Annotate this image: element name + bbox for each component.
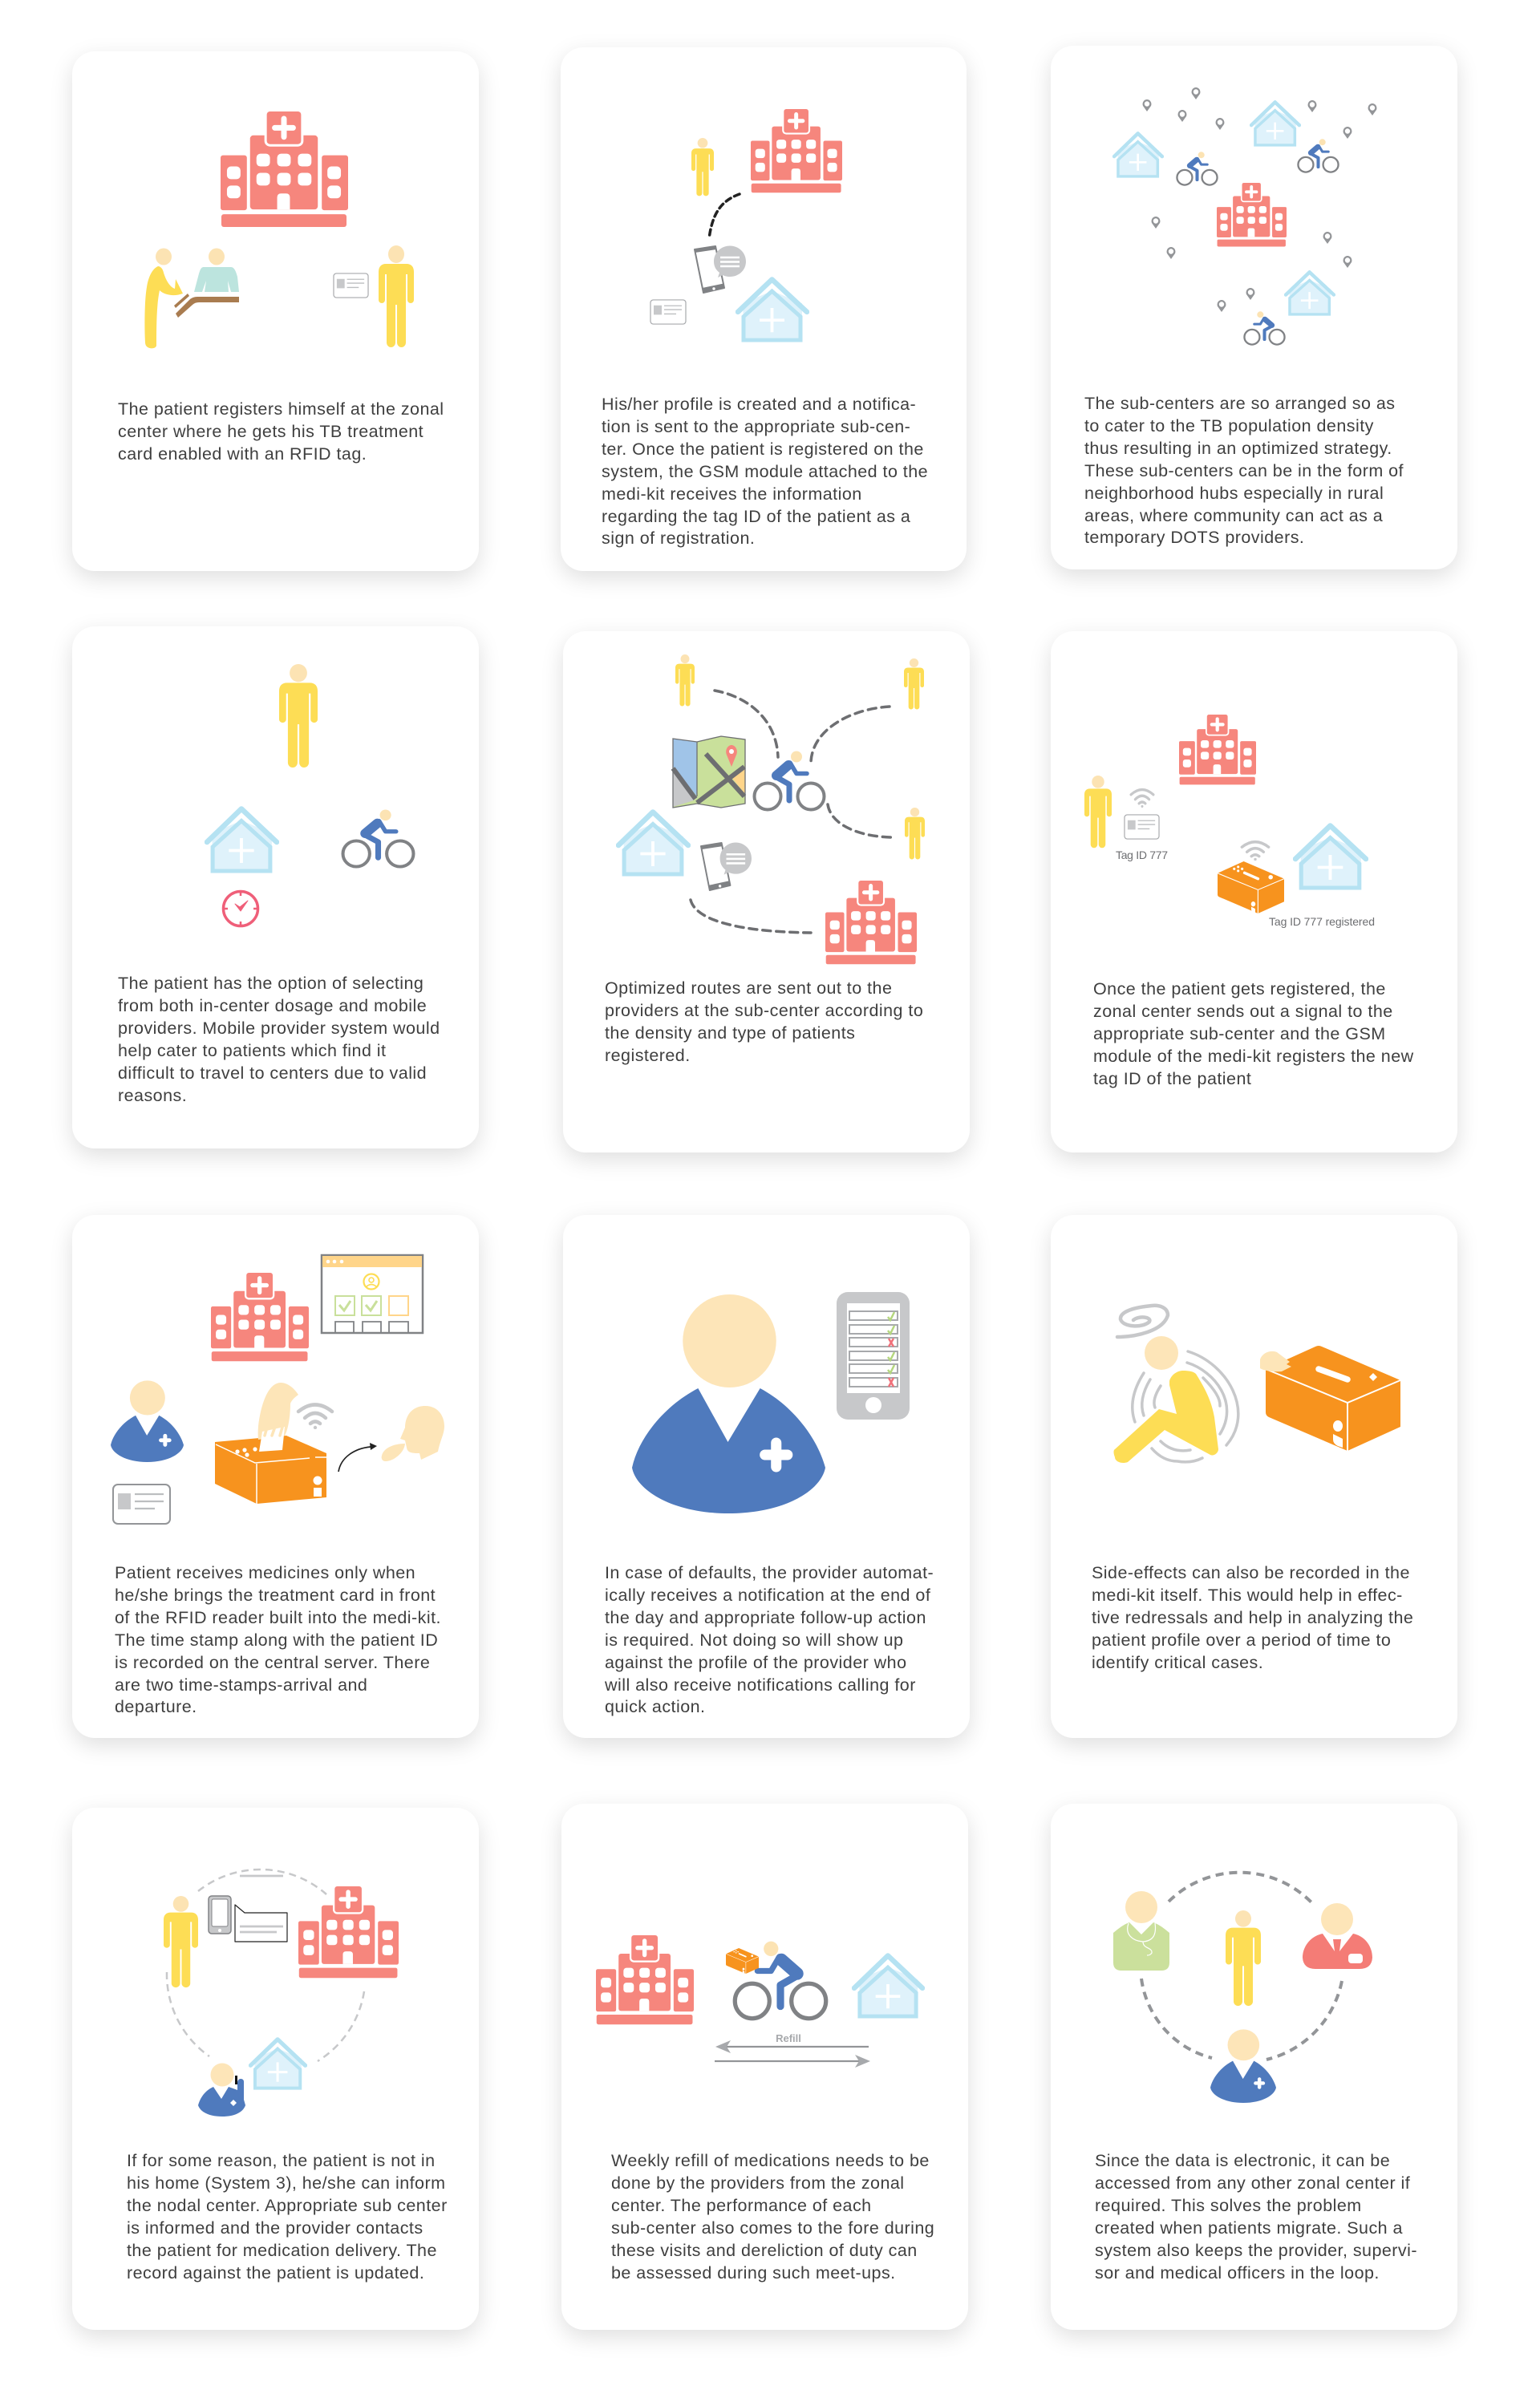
icon: provider: [111, 1380, 184, 1462]
icon: medi-kit: [1266, 1346, 1400, 1451]
text: step description: [605, 978, 923, 1065]
text: step description: [1095, 2151, 1417, 2283]
text: step description: to cater to the TB population density: [1084, 416, 1374, 435]
icon: patient: [279, 664, 318, 768]
panel: default notifications: [563, 1215, 970, 1738]
panel: zonal center registration: [72, 51, 479, 571]
icon: treatment card: [334, 273, 368, 298]
text: step description: [1092, 1563, 1413, 1672]
illustration: RFID reader on medi-kit: [111, 1254, 444, 1525]
text: step description: tion is sent to the appropriate sub-cen-: [602, 417, 910, 436]
text: step description: identify critical cases.: [1092, 1653, 1263, 1672]
icon: provider: [632, 1294, 825, 1513]
text: step description: from both in-center dosage and mobile: [118, 996, 427, 1015]
text: step description: of the RFID reader built into the medi-kit.: [115, 1608, 441, 1627]
icon: shaking lines: [1133, 1351, 1238, 1462]
illustration: patient calls nodal center: [164, 1869, 399, 2117]
icon: patient taking medicine: [382, 1406, 444, 1461]
text: step description: reasons.: [118, 1086, 187, 1105]
text: step description: His/her profile is created and a notifica-: [602, 395, 916, 414]
icon: message bubble: [235, 1876, 287, 1942]
text: step description: zonal center sends out a signal to the: [1093, 1002, 1393, 1021]
panel: tag registration: [1051, 631, 1457, 1152]
arrows: dashed routes: [691, 691, 894, 933]
icon: patient: [164, 1896, 198, 1987]
text: step description: help cater to patients which find it: [118, 1041, 386, 1060]
text: step description: [611, 2151, 934, 2283]
icon: sick patient: [1113, 1336, 1218, 1463]
icon: patient: [1226, 1910, 1261, 2006]
text: step description: tive redressals and help in analyzing the: [1092, 1608, 1413, 1627]
text: step description: providers. Mobile provider system would: [118, 1019, 440, 1038]
text: step description: thus resulting in an optimized strategy.: [1084, 439, 1392, 458]
icon: medi-kit: [1218, 861, 1284, 913]
panel: dosage options: [72, 626, 479, 1148]
text: step description: If for some reason, the patient is not in: [127, 2151, 436, 2170]
text: step description: providers at the sub-center according to: [605, 1001, 923, 1020]
icon: mobile provider: [343, 809, 413, 867]
panel: data accessible anywhere: [1051, 1804, 1457, 2330]
illustration: notification to sub-center: [650, 109, 842, 342]
icon: hospital: [211, 1271, 309, 1361]
illustration: provider and checklist: [632, 1292, 910, 1513]
text: step description: [605, 1563, 934, 1716]
text: step description: he/she brings the treatment card in front: [115, 1586, 436, 1605]
text: step description: [115, 1563, 441, 1716]
icon: patient: [1084, 776, 1112, 848]
arrows: dashed loop: [1141, 1873, 1342, 2060]
icons: sub-center houses: [1114, 102, 1334, 315]
icon: treatment card: [113, 1485, 170, 1524]
text: step description: center. The performance of each: [611, 2196, 872, 2215]
illustration: network around patient: [1113, 1870, 1372, 2103]
text: step description: Patient receives medicines only when: [115, 1563, 415, 1582]
text: step description: The time stamp along with the patient ID: [115, 1630, 438, 1650]
text: step description: [127, 2151, 448, 2283]
icon: provider: [1210, 2029, 1276, 2103]
text: step description: Since the data is electronic, it can be: [1095, 2151, 1390, 2170]
text: step description: sign of registration.: [602, 529, 755, 548]
icon: hospital: [751, 107, 842, 192]
icon: sub-center house: [854, 1955, 922, 2017]
arrow: refill to hospital: [715, 2040, 869, 2053]
icon: hospital: [298, 1885, 399, 1978]
arrows: dashed circle: [167, 1869, 364, 2061]
text: step description: registered.: [605, 1046, 691, 1065]
text: step description: departure.: [115, 1697, 197, 1716]
text: step description: Weekly refill of medications needs to be: [611, 2151, 930, 2170]
text: step description: ter. Once the patient is registered on the: [602, 440, 924, 459]
text: step description: neighborhood hubs especially in rural: [1084, 484, 1384, 503]
text: step description: [602, 395, 928, 548]
icon: wifi signal from medi-kit: [1242, 842, 1269, 861]
text: step description: the patient for medication delivery. The: [127, 2241, 437, 2260]
text: step description: [118, 974, 440, 1105]
text: step description: is required. Not doing so will show up: [605, 1630, 903, 1650]
icon: phone with default checklist: [837, 1292, 910, 1420]
icon: sub-center house: [618, 812, 688, 875]
text: step description: areas, where community can act as a: [1084, 506, 1383, 525]
text: step description: [1093, 979, 1414, 1088]
icon: receptionist behind desk: [174, 249, 239, 318]
arrow: to patient: [338, 1443, 377, 1472]
icon: provider on phone: [198, 2063, 245, 2117]
panel: sub-center distribution: [1051, 46, 1457, 569]
icon: patient: [691, 138, 714, 196]
text: step description: is recorded on the central server. There: [115, 1653, 430, 1672]
text: step description: medi-kit receives the information: [602, 484, 862, 504]
panel: patient away from home: [72, 1808, 479, 2330]
icon: sub-center house: [250, 2040, 306, 2088]
text: step description: required. This solves the problem: [1095, 2196, 1362, 2215]
text: step description: ically receives a notification at the end of: [605, 1586, 930, 1605]
icon: patient at desk: [144, 249, 183, 348]
text: step description: [1084, 394, 1404, 547]
text: step description: sor and medical officers in the loop.: [1095, 2263, 1380, 2283]
text: step description: his home (System 3), he/she can inform: [127, 2173, 445, 2193]
panel: profile notification: [561, 47, 967, 571]
icon: sub-center house: [1295, 826, 1366, 889]
text: step description: module of the medi-kit registers the new: [1093, 1047, 1414, 1066]
text: step description: done by the providers from the zonal: [611, 2173, 905, 2193]
icon: doctor: [1113, 1891, 1169, 1971]
icon: hospital: [221, 109, 348, 227]
icon: phone with message: [700, 843, 752, 890]
text: step description: is informed and the provider contacts: [127, 2218, 424, 2238]
icon: treatment card: [1125, 815, 1159, 839]
text: step description: temporary DOTS providers.: [1084, 528, 1304, 547]
icon: wifi signal from card: [1131, 790, 1153, 808]
panel: optimized routes: [563, 631, 970, 1152]
illustration: tag ID signal: [1084, 715, 1375, 928]
icons: location pins: [1143, 87, 1376, 312]
icon: medi-kit: [726, 1948, 759, 1974]
text: step description: difficult to travel to centers due to valid: [118, 1063, 427, 1083]
icon: dizziness swirl: [1117, 1306, 1168, 1337]
panel: side-effects: [1051, 1215, 1457, 1738]
panel: medicine dispensing: [72, 1215, 479, 1738]
icons: providers on bikes: [1177, 139, 1339, 345]
text: step description: medi-kit itself. This would help in effec-: [1092, 1586, 1403, 1605]
icon: medical officer: [1303, 1903, 1372, 1969]
text: step description: record against the patient is updated.: [127, 2263, 424, 2283]
icon: hospital: [1217, 181, 1287, 246]
text: step description: [118, 399, 444, 464]
icon: wifi signal: [298, 1405, 332, 1429]
icon: hospital: [825, 879, 917, 964]
text: step description: the density and type of patients: [605, 1023, 855, 1043]
illustration: in-center or mobile provider: [205, 664, 415, 927]
illustration: distribution map: [1112, 87, 1376, 346]
icon: sub-center house: [207, 808, 277, 872]
text: step description: Once the patient gets registered, the: [1093, 979, 1386, 999]
text: step description: are two time-stamps-arrival and: [115, 1675, 367, 1695]
icon: tablet phone: [209, 1896, 231, 1934]
text: step description: patient profile over a period of time to: [1092, 1630, 1391, 1650]
illustration: refill trip: [596, 1935, 925, 2068]
text: step description: regarding the tag ID of the patient as a: [602, 507, 910, 526]
icons: patients: [675, 654, 925, 859]
text: step description: will also receive notifications calling for: [605, 1675, 916, 1695]
icon: patient with card: [379, 245, 414, 347]
text: step description: The patient registers himself at the zonal: [118, 399, 444, 419]
label: tag ID: Tag ID 777: [1116, 849, 1168, 861]
icon: hand on medi-kit: [1260, 1351, 1291, 1371]
arrow: dashed signal path: [709, 194, 740, 239]
icon: hospital: [1179, 713, 1256, 784]
text: step description: card enabled with an RFID tag.: [118, 444, 367, 464]
text: step description: The sub-centers are so arranged so as: [1084, 394, 1396, 413]
text: step description: The patient has the option of selecting: [118, 974, 424, 993]
text: step description: created when patients migrate. Such a: [1095, 2218, 1403, 2238]
text: step description: center where he gets his TB treatment: [118, 422, 424, 441]
illustration: patient registers at zonal center: [144, 111, 414, 348]
text: step description: be assessed during such meet-ups.: [611, 2263, 896, 2283]
label: refill: Refill: [776, 2032, 801, 2044]
text: step description: system also keeps the provider, supervi-: [1095, 2241, 1417, 2260]
text: step description: In case of defaults, the provider automat-: [605, 1563, 934, 1582]
text: step description: Optimized routes are sent out to the: [605, 978, 892, 998]
text: step description: the day and appropriate follow-up action: [605, 1608, 926, 1627]
text: step description: appropriate sub-center and the GSM: [1093, 1024, 1386, 1043]
text: step description: These sub-centers can be in the form of: [1084, 461, 1404, 480]
icon: medi-kit with hand: [215, 1383, 326, 1504]
icon: provider on bike: [735, 1942, 826, 2019]
text: step description: system, the GSM module attached to the: [602, 462, 928, 481]
text: step description: against the profile of the provider who: [605, 1653, 906, 1672]
illustration: routes from sub-center: [616, 654, 925, 964]
text: step description: tag ID of the patient: [1093, 1069, 1251, 1088]
text: step description: accessed from any other zonal center if: [1095, 2173, 1410, 2193]
illustration: recording side-effects: [1113, 1304, 1400, 1464]
text: step description: Side-effects can also be recorded in the: [1092, 1563, 1410, 1582]
icon: clock: [223, 892, 258, 926]
text: step description: quick action.: [605, 1697, 706, 1716]
text: step description: the nodal center. Appropriate sub center: [127, 2196, 448, 2215]
text: step description: sub-center also comes to the fore during: [611, 2218, 934, 2238]
icon: provider on bike: [754, 751, 825, 810]
arrow: refill to house: [715, 2055, 870, 2068]
icon: phone with message: [695, 245, 746, 294]
icon: map: [673, 736, 745, 808]
icon: treatment card: [650, 300, 686, 324]
icon: server window: [322, 1255, 423, 1333]
text: step description: these visits and dereliction of duty can: [611, 2241, 918, 2260]
icon: sub-center house: [738, 279, 807, 341]
panel: weekly refill: [561, 1804, 968, 2330]
icon: hospital: [596, 1934, 694, 2024]
label: tag registered: Tag ID 777 registered: [1269, 915, 1375, 928]
